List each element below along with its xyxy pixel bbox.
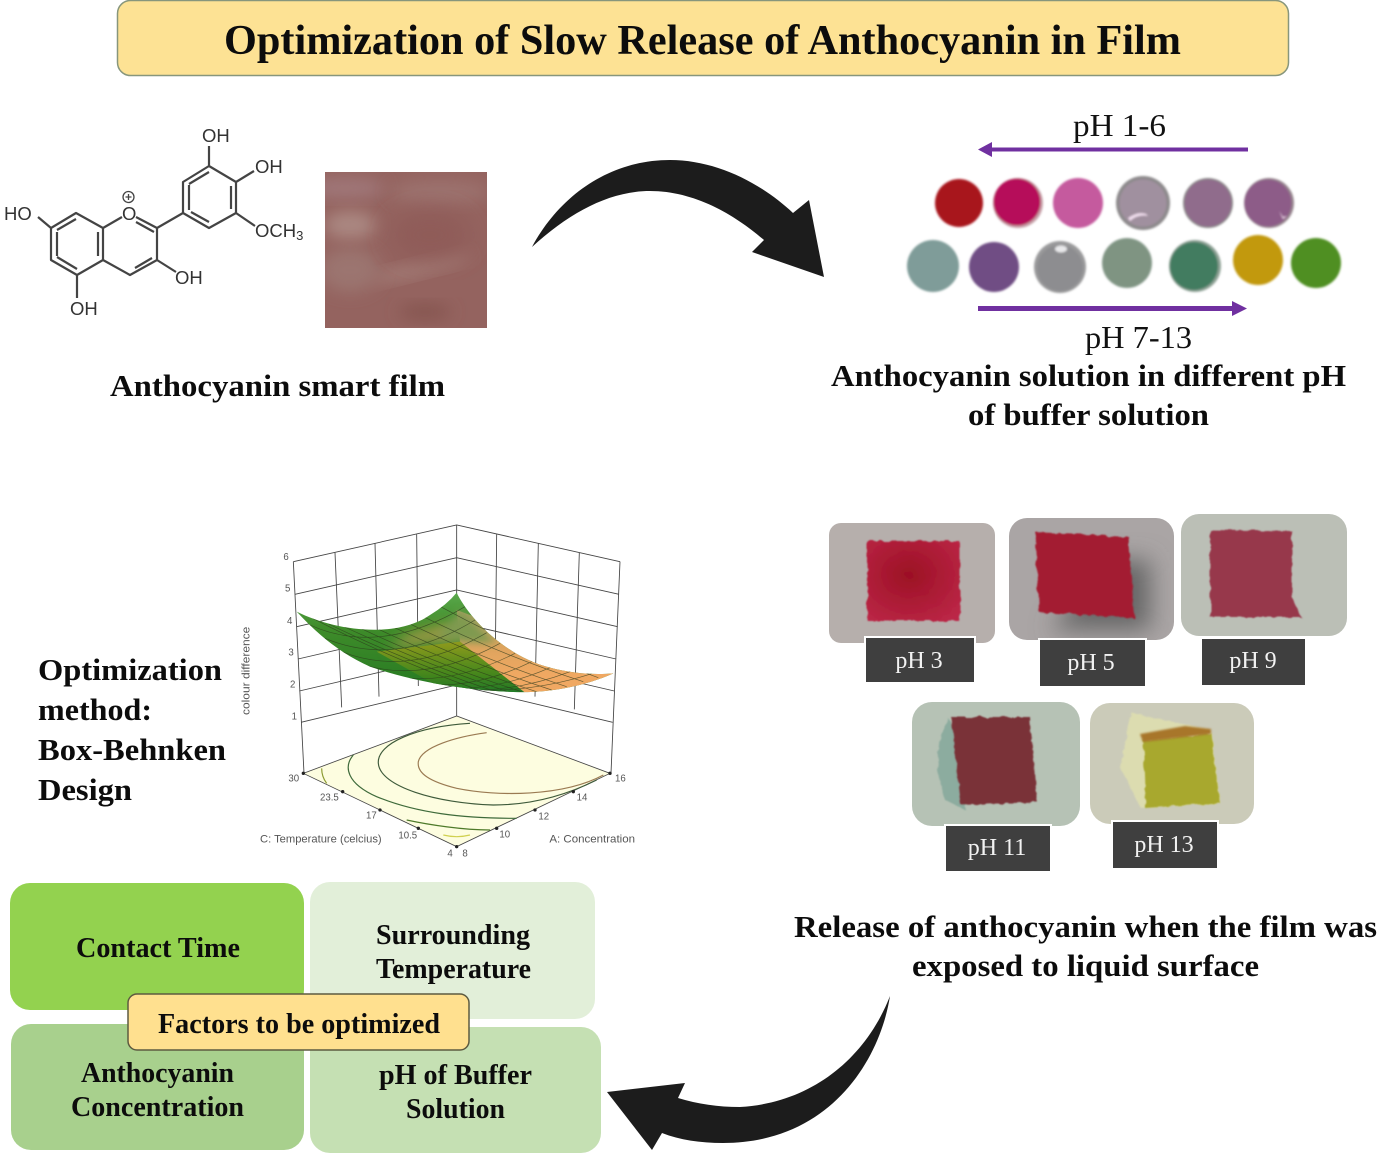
axis tick labels: 2 [290,680,295,691]
caption: solution in different pH [831,358,1346,432]
factor: anthocyanin concentration: Concentration [71,1092,244,1123]
anthocyanin film photo [325,172,487,328]
axis tick labels: 1 [292,711,297,722]
title: Optimization of Slow Release of Anthocyanin in Film [224,18,1181,64]
pH 9 film sample: pH 9 [1229,648,1277,674]
axis tick labels: 4 [447,849,453,860]
axis titles: A: Concentration [549,833,635,845]
axis tick labels: 17 [366,810,377,821]
factor: anthocyanin concentration [11,1024,304,1150]
arrow: release to factors [607,996,890,1150]
title banner [118,0,1288,76]
3D response surface plot [240,525,635,860]
factor: contact time [10,883,304,1010]
axis titles: colour difference [240,627,252,715]
heading: optimization method: method: [38,692,152,727]
anthocyanin molecule structure [4,125,303,319]
anthocyanin molecule structure: 3 [296,228,303,243]
pH 5 film sample [1009,518,1174,687]
axis tick labels: 10.5 [398,830,417,841]
heading: optimization method: Box-Behnken [38,732,226,767]
pH 11 film sample: pH 11 [968,835,1026,861]
anthocyanin molecule structure: OH [255,156,283,177]
anthocyanin molecule structure: OH [70,298,98,319]
arrow: pH 1-6 direction [978,142,1248,157]
surface [293,590,617,697]
axis tick labels: 14 [577,793,588,804]
label: pH 1-6: pH 1-6 [1073,107,1166,143]
axis tick labels: 4 [287,616,293,627]
caption: release of anthocyanin: Release of anthocyanin when the film was [794,909,1377,944]
label: pH 7-13: pH 7-13 [1085,319,1192,355]
pH solution colour droplets [907,176,1341,293]
factor: pH of buffer solution: pH of Buffer [379,1060,532,1091]
axis tick labels: 30 [288,774,299,785]
factor: surrounding temperature [310,882,595,1019]
axis tick labels: 10 [499,829,510,840]
caption: release of anthocyanin [794,909,1377,983]
axis tick labels: 8 [462,849,468,860]
pH 3 film sample [829,523,995,683]
anthocyanin molecule structure: O [122,203,136,224]
axis tick labels: 12 [538,811,549,822]
pH 13 film sample: pH 13 [1134,832,1194,858]
caption: solution in different pH: Anthocyanin solution in different pH [831,358,1346,393]
axis tick labels: 5 [285,584,290,595]
arrow: film to solution [532,160,824,277]
anthocyanin molecule structure: OCH [255,220,296,241]
anthocyanin molecule structure: HO [4,203,32,224]
axis tick labels: 3 [288,648,294,659]
axis tick labels: 23.5 [320,793,339,804]
axis titles [240,627,635,845]
factor: surrounding temperature: Temperature [376,954,531,985]
anthocyanin molecule structure: OH [202,125,230,146]
pH 3 film sample: pH 3 [895,648,943,674]
heading: optimization method: Optimization [38,652,222,687]
axis titles: C: Temperature (celcius) [260,833,382,845]
label: anthocyanin smart film: Anthocyanin smart film [110,368,445,403]
callout: factors to be optimized [128,994,469,1050]
heading: optimization method: Design [38,772,132,807]
pH 13 film sample [1090,703,1254,869]
axis tick labels [283,552,626,860]
factor: pH of buffer solution: Solution [406,1094,505,1125]
caption: solution in different pH: of buffer solution [968,397,1209,432]
factor: surrounding temperature: Surrounding [376,920,530,951]
factor: anthocyanin concentration: Anthocyanin [81,1058,234,1089]
heading: optimization method [38,652,226,807]
callout: factors to be optimized: Factors to be optimized [158,1009,440,1040]
factor: contact time: Contact Time [76,933,240,964]
caption: release of anthocyanin: exposed to liquid surface [912,948,1259,983]
arrow: pH 7-13 direction [978,301,1247,316]
axis tick labels: 6 [283,552,289,563]
plot walls [293,525,620,773]
anthocyanin molecule structure: OH [175,267,203,288]
pH 9 film sample [1181,514,1347,686]
pH 11 film sample [912,702,1080,872]
factor: pH of buffer solution [310,1027,601,1153]
axis tick labels: 16 [615,774,626,785]
pH 5 film sample: pH 5 [1067,650,1115,676]
plot floor with contours [302,716,612,848]
